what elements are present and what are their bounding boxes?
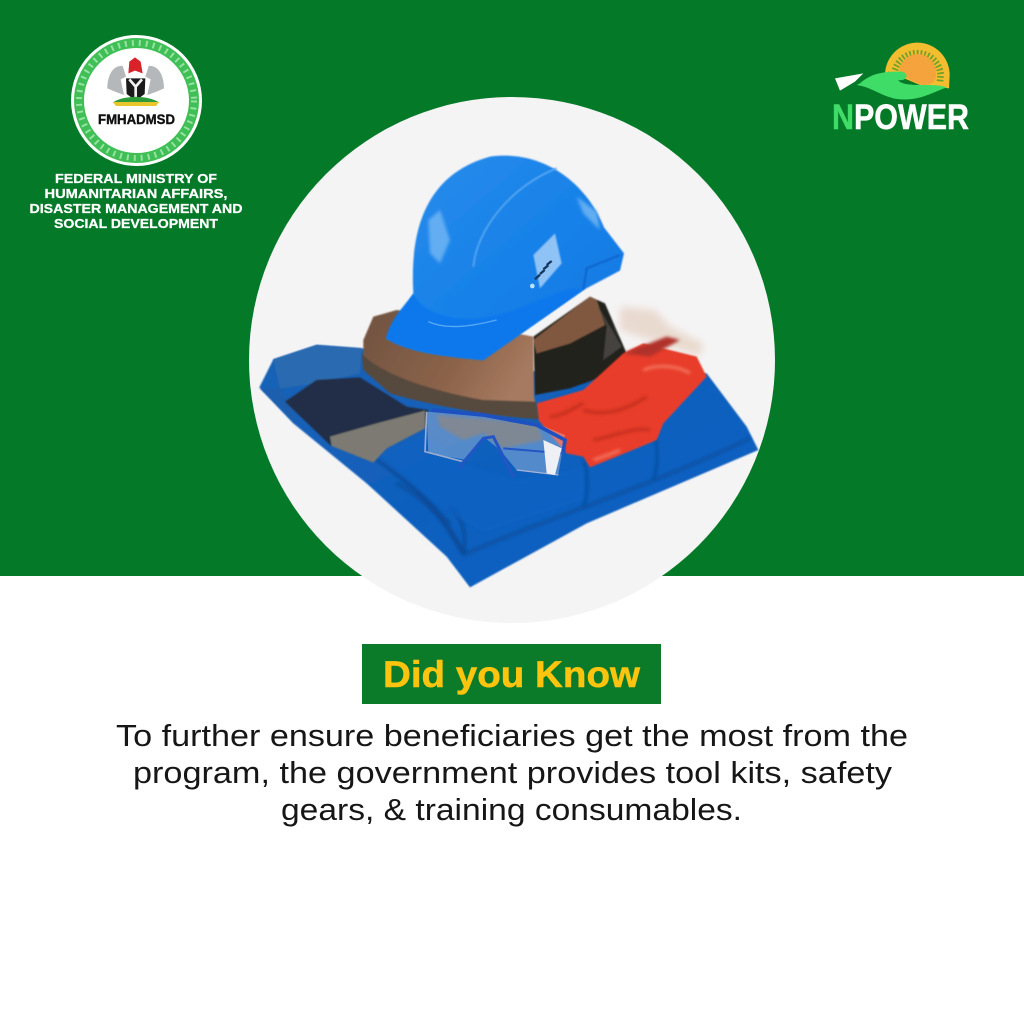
- band pattern: [79, 43, 194, 158]
- icon: rising sun over hand: [835, 43, 950, 99]
- green header background: [0, 0, 1024, 576]
- NPOWER wordmark: NPOWER: [832, 98, 969, 137]
- photo: safety gear: [259, 156, 758, 587]
- logo abbreviation: FMHADMSD: [98, 111, 175, 127]
- red gloves: [537, 307, 707, 467]
- left boot: [362, 310, 539, 419]
- ministry name: FEDERAL MINISTRY OF: [55, 171, 217, 186]
- logo outer white ring: [71, 35, 202, 166]
- ministry logo: [71, 35, 202, 166]
- body text: program, the government provides tool kits, safety: [133, 755, 893, 790]
- logo inner white disc: [84, 48, 188, 152]
- body text: [116, 718, 908, 827]
- heading banner: [362, 644, 661, 704]
- blue hard hat: [386, 156, 624, 360]
- body text: gears, & training consumables.: [281, 792, 742, 827]
- blue safety goggles: [425, 410, 565, 477]
- photo circle panel: [249, 97, 775, 623]
- banner background: [362, 644, 661, 704]
- NPower logo: [832, 43, 969, 137]
- icon: coat of arms: [107, 57, 164, 106]
- ministry name: SOCIAL DEVELOPMENT: [54, 216, 218, 231]
- logo patterned green band: [79, 43, 194, 158]
- body text: To further ensure beneficiaries get the most from the: [116, 718, 908, 753]
- ministry name: HUMANITARIAN AFFAIRS,: [44, 186, 228, 201]
- ministry name: [30, 171, 242, 231]
- right boot: [533, 297, 627, 395]
- ministry name: DISASTER MANAGEMENT AND: [30, 201, 242, 216]
- folded blue coverall: [259, 345, 758, 587]
- heading text: Did you Know: [383, 654, 640, 695]
- dark sleeve with grey stripe: [285, 377, 428, 463]
